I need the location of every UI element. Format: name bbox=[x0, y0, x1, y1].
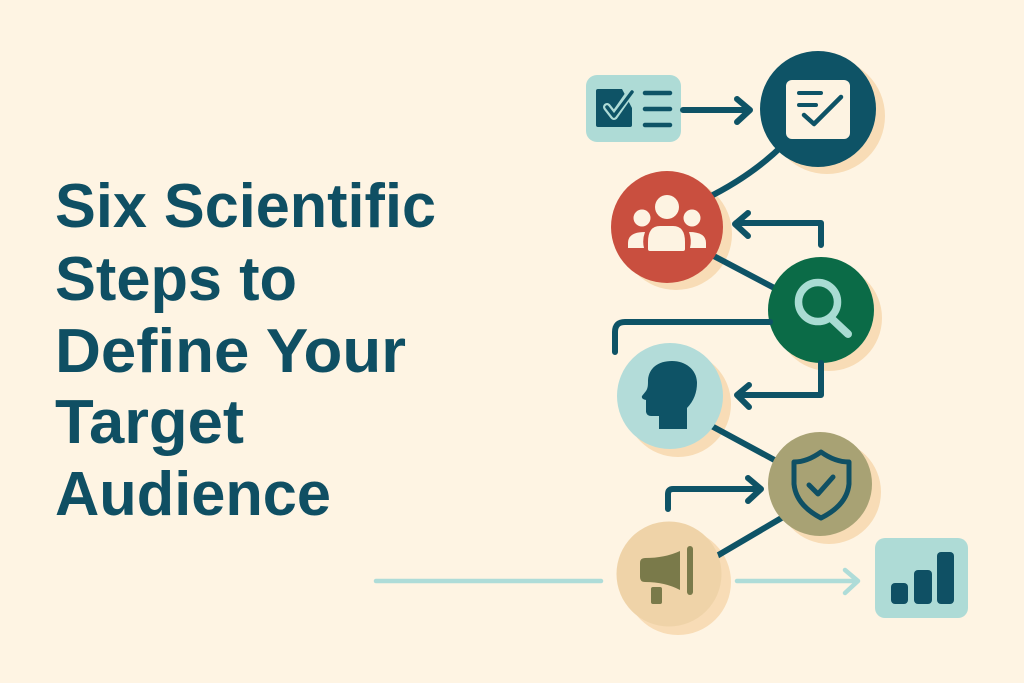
arrow: step 6 to results bbox=[737, 570, 858, 593]
connector: step 4 to step 5 bbox=[706, 423, 780, 463]
incoming light line bbox=[376, 579, 601, 583]
step 2: people circle bbox=[611, 171, 723, 283]
connector: step 1 to step 2 bbox=[705, 144, 784, 199]
step 1: survey circle bbox=[760, 51, 876, 167]
title: Six Scientific bbox=[55, 172, 436, 241]
connector: step 2 to step 3 bbox=[708, 253, 782, 292]
connector: step 3 bracket line bbox=[615, 322, 770, 352]
arrow: step 3 to step 2 bbox=[735, 213, 821, 245]
step 6: megaphone circle bbox=[616, 522, 722, 626]
title bbox=[55, 172, 436, 529]
title: Steps to bbox=[55, 245, 297, 314]
step 3: search circle bbox=[768, 257, 874, 363]
step 5: shield circle bbox=[768, 432, 872, 536]
connector: step 6 to step 5 bbox=[710, 513, 790, 560]
arrow: step 6 to step 5 bbox=[668, 478, 761, 509]
title: Target bbox=[55, 388, 244, 457]
checklist card bbox=[586, 75, 681, 142]
title: Define Your bbox=[55, 317, 406, 386]
circle drop shadows bbox=[620, 58, 885, 635]
title: Audience bbox=[55, 460, 331, 529]
step 4: head circle bbox=[617, 343, 723, 449]
results bar chart card bbox=[875, 538, 968, 618]
arrow: checklist to step 1 bbox=[683, 99, 750, 122]
arrow: step 3 to step 4 bbox=[737, 363, 821, 407]
